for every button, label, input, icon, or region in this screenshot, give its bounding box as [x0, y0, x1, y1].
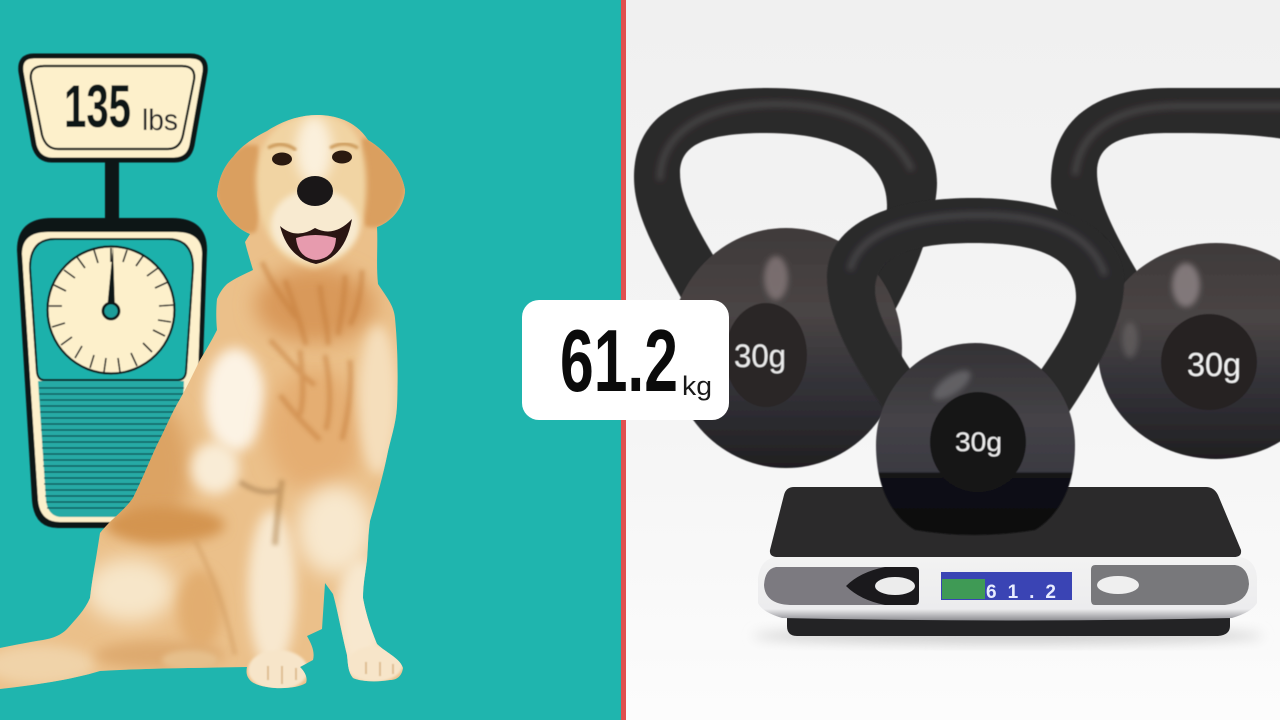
digital kitchen scale	[753, 487, 1263, 644]
handle	[634, 88, 937, 310]
kettlebell: front on scale	[827, 198, 1124, 535]
panel: white background	[626, 0, 1280, 720]
display: 61.2	[986, 582, 1056, 603]
ball highlight	[764, 256, 788, 300]
weighing pad	[770, 487, 1241, 557]
nose	[297, 176, 333, 206]
ball	[1098, 243, 1280, 459]
scale foot	[787, 612, 1230, 636]
value 61.2 kg: 61.2	[560, 311, 678, 410]
dial needle	[107, 247, 115, 310]
handle highlight	[1075, 106, 1280, 175]
ball	[670, 228, 902, 468]
ribbed plate	[38, 381, 184, 517]
panel: teal background	[0, 0, 622, 720]
handle highlight	[660, 104, 912, 180]
left control panel	[764, 567, 919, 605]
display	[941, 572, 1072, 603]
ball	[876, 343, 1075, 535]
scale base	[758, 557, 1257, 620]
handle	[827, 198, 1124, 425]
scale display plate	[21, 56, 205, 160]
ball highlight	[929, 365, 975, 405]
dog ears	[216, 138, 406, 233]
dial window	[30, 239, 193, 380]
weight label: 30g	[734, 338, 786, 374]
reading 135 lbs: 135	[64, 73, 131, 140]
handle	[1051, 88, 1280, 300]
ball highlight	[1172, 263, 1200, 307]
dog fur strokes	[195, 262, 362, 655]
brows	[268, 144, 358, 150]
value 61.2 kg: kg	[682, 371, 712, 401]
weight label	[1161, 314, 1257, 410]
mouth	[280, 219, 352, 264]
weight label	[725, 303, 807, 407]
weight label	[930, 392, 1026, 492]
eyes	[272, 152, 292, 166]
scale body	[17, 218, 207, 528]
callout: converted weight	[522, 300, 729, 420]
red divider	[621, 0, 626, 720]
reading 135 lbs: lbs	[142, 104, 178, 137]
tongue	[296, 235, 336, 260]
weight label: 30g	[1187, 346, 1241, 383]
scale stem	[105, 160, 119, 222]
right control panel	[1091, 565, 1249, 605]
golden retriever	[0, 100, 420, 700]
weight label: 30g	[955, 427, 1002, 457]
dog body shading	[0, 267, 398, 685]
handle highlight	[850, 215, 1105, 275]
dial	[48, 246, 174, 374]
scale shadow	[753, 628, 1263, 644]
kettlebell: back right	[1051, 88, 1280, 459]
dog base coat	[0, 100, 420, 700]
kettlebell: back left	[634, 88, 937, 468]
dog paws	[162, 646, 403, 690]
icon: vintage scale	[17, 56, 207, 528]
dog head	[256, 114, 366, 268]
